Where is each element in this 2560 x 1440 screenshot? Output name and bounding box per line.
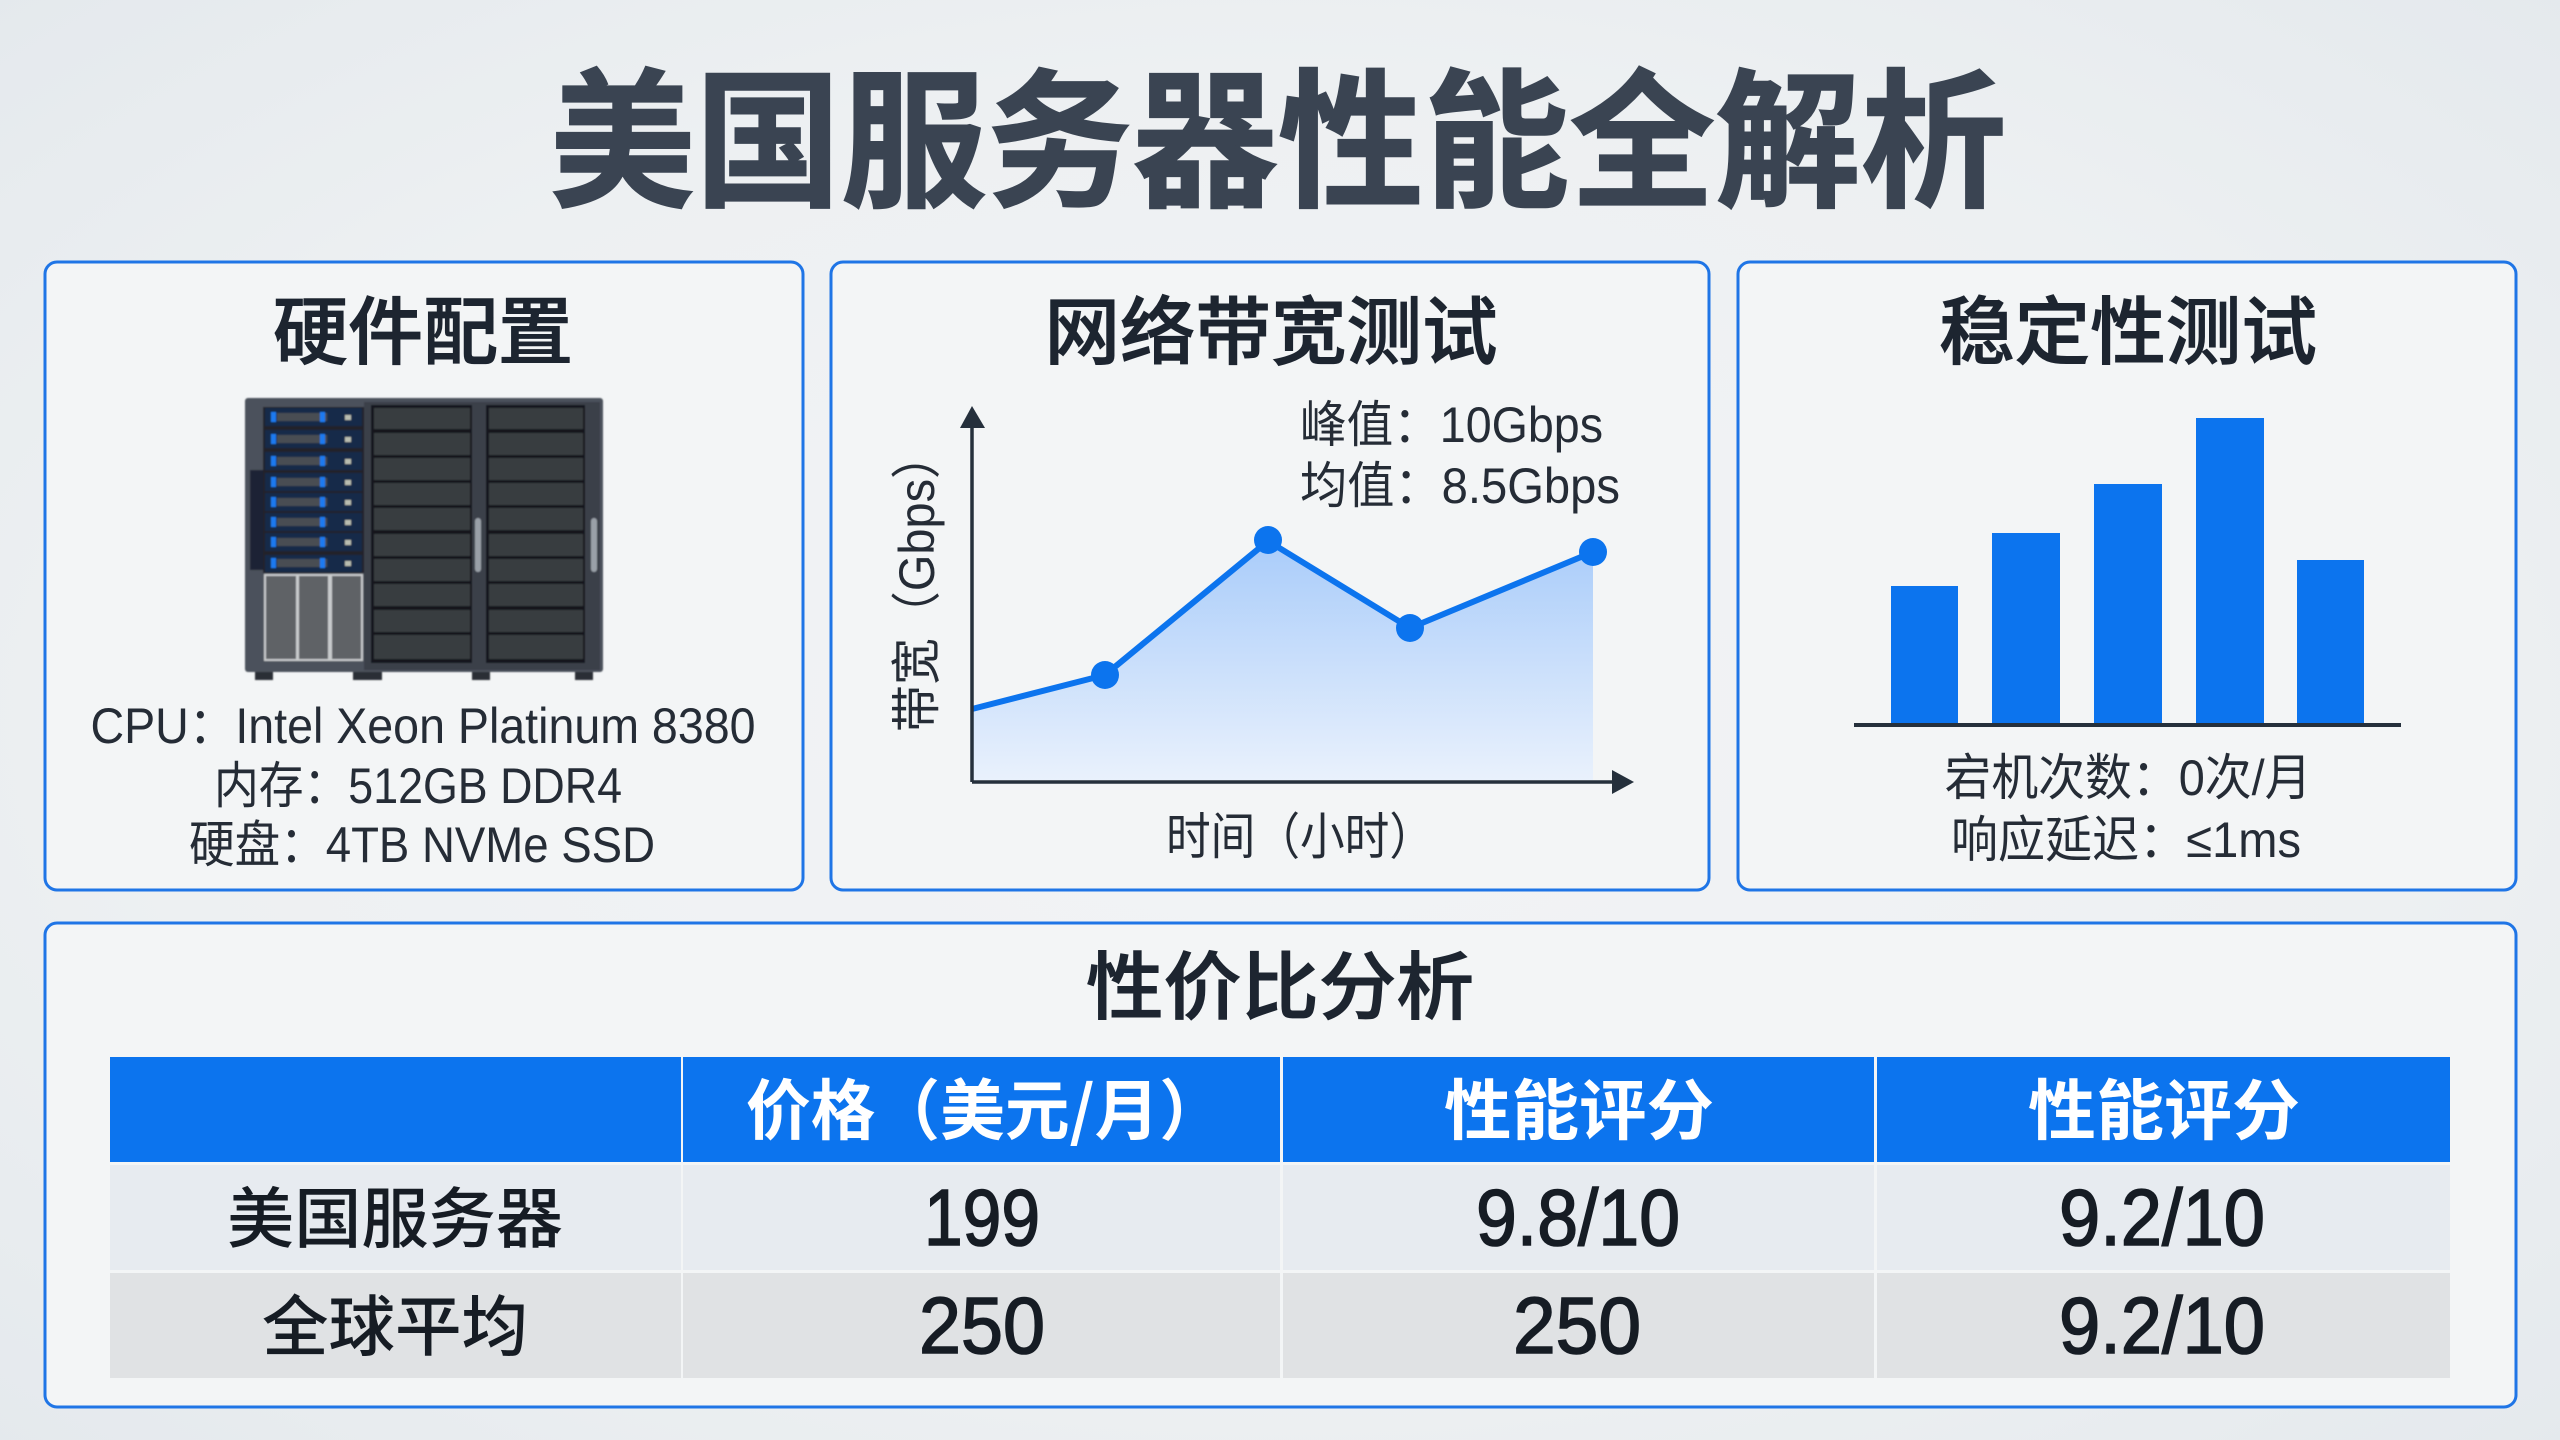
y axis label: 带宽（Gbps）: [889, 432, 945, 732]
hardware specs text: CPU：Intel Xeon Platinum 8380: [90, 698, 756, 754]
panel: stability test: [1738, 262, 2516, 890]
stability metrics text: 宕机次数：0次/月: [1944, 750, 2312, 806]
table row: US server: 199: [924, 1173, 1040, 1262]
table header row: 性能评分: [1444, 1058, 1714, 1154]
stability metrics text: [1944, 750, 2312, 868]
title: 美国服务器性能全解析: [550, 22, 2006, 239]
table row: US server: [227, 1166, 2265, 1262]
table row: global average: 250: [919, 1281, 1045, 1370]
peak and average labels: 峰值：10Gbps: [1300, 397, 1603, 453]
line chart: bandwidth over time: [960, 406, 1634, 794]
peak and average labels: 均值：8.5Gbps: [1300, 458, 1620, 514]
heading: stability: 稳定性测试: [1939, 273, 2317, 380]
table row: global average: 9.2/10: [2059, 1281, 2265, 1370]
panel: cost-performance analysis: [45, 923, 2516, 1407]
table: [110, 1057, 2450, 1378]
table row: global average: 全球平均: [262, 1274, 528, 1370]
heading: hardware: 硬件配置: [273, 273, 573, 380]
table row: US server: 9.2/10: [2059, 1173, 2265, 1262]
table row: US server: 9.8/10: [1476, 1173, 1680, 1262]
table header row: [746, 1058, 2300, 1154]
table header row: 价格（美元/月）: [746, 1058, 1224, 1154]
heading: bandwidth: 网络带宽测试: [1044, 273, 1498, 380]
table row: US server: 美国服务器: [227, 1166, 563, 1262]
panel: hardware configuration: [45, 262, 803, 890]
table header row: 性能评分: [2028, 1058, 2300, 1154]
table row: global average: [262, 1274, 2265, 1370]
hardware specs text: [90, 698, 756, 873]
table row: global average: 250: [1513, 1281, 1641, 1370]
x axis label: 时间（小时）: [1166, 809, 1434, 865]
stability metrics text: 响应延迟：≤1ms: [1951, 812, 2301, 868]
heading: cost-performance: 性价比分析: [1086, 928, 1474, 1035]
icon: server rack: [245, 398, 603, 680]
bar chart: [1854, 418, 2401, 727]
peak and average labels: [1300, 397, 1620, 514]
hardware specs text: 硬盘：4TB NVMe SSD: [189, 817, 655, 873]
panel: network bandwidth test: [831, 262, 1709, 890]
hardware specs text: 内存：512GB DDR4: [214, 758, 622, 814]
